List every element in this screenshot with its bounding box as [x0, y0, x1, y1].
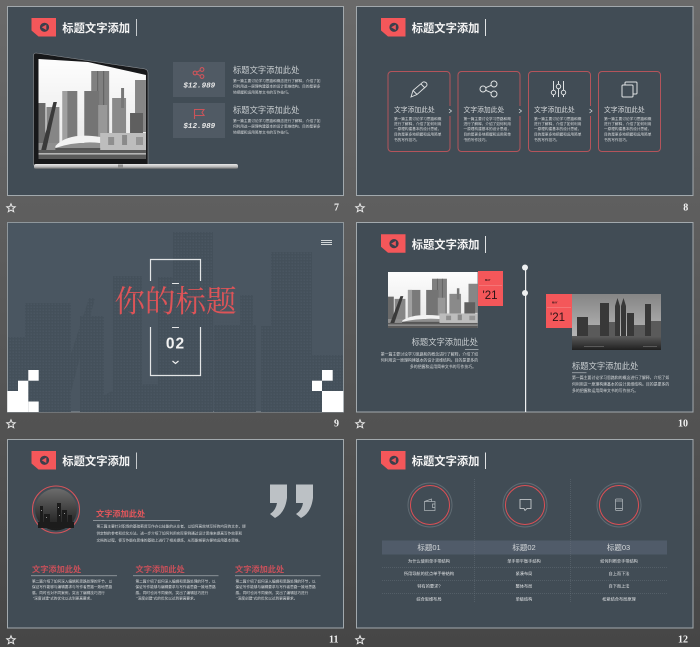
badge 1 wallet — [408, 483, 452, 527]
photo 2 — [572, 294, 661, 350]
column heading 1: 标题01 — [417, 542, 441, 552]
page number 7: 7 — [334, 202, 339, 214]
column 1 — [31, 564, 117, 600]
column 3 rows — [600, 558, 638, 602]
chevron — [172, 361, 178, 364]
icon: flag — [194, 110, 204, 119]
icon: wallet — [424, 499, 435, 510]
text block: right: 多的把握和运用简单文书的写作技巧。 — [572, 388, 638, 393]
date tag 1: '21 — [482, 290, 498, 302]
column 1 rows — [404, 558, 454, 602]
column 2 rows: 单手带平衡手结构 — [507, 558, 541, 565]
card 4 — [598, 72, 660, 152]
column 2: 感。同时也对不同案例，突出了编辑技巧进行 — [136, 590, 209, 595]
timeline — [522, 264, 528, 412]
date tag 2 — [546, 294, 572, 328]
laptop with city photo — [34, 53, 238, 169]
slide 10 header tag — [381, 234, 406, 253]
card 4: 文字添加此处 — [604, 105, 645, 114]
table band — [382, 540, 667, 554]
badge 2 chat — [503, 483, 547, 527]
column 1: "深度创建"式的优化以达到更高要求。 — [33, 596, 94, 600]
stat card: share — [173, 62, 225, 97]
footer star — [7, 420, 15, 428]
badge 3 phone — [597, 483, 641, 527]
column 1 rows: 综合思维布局 — [416, 596, 442, 602]
column 2 rows — [507, 558, 541, 602]
column 2: 第二篇介绍了如何深入编辑和思路处理的环节，以 — [136, 578, 216, 584]
column heading 2: 标题02 — [512, 542, 536, 552]
card 3: 进行了解释，介绍了如何利用 — [534, 121, 582, 126]
card 2 — [458, 72, 520, 152]
card 2: 书的写作技巧。 — [464, 137, 489, 142]
column 3: 第二篇介绍了如何深入编辑和思路处理的环节，以 — [236, 578, 316, 584]
feature text: 第三篇主要针对职场的基础薪资写作办公技能的从业者，以如何高效地写好的内容的文本，提 — [96, 524, 246, 528]
section title: 你的标题 — [114, 277, 236, 321]
column 1: 文字添加此处 — [32, 564, 82, 574]
text block: second item: 何利用这一原理构建基本的设计思维结构。目的是更多 — [233, 124, 321, 128]
slide 10 title: 标题文字添加 — [412, 238, 479, 252]
icon: copy — [622, 82, 637, 97]
icon: phone — [616, 499, 622, 510]
text block: second item: 标题文字添加此处 — [233, 105, 299, 115]
panel: slide 8 — [356, 6, 693, 214]
page number 12: 12 — [678, 634, 688, 646]
text block: left: 多的把握和运用简单文书的写作技巧。 — [410, 364, 476, 369]
page number 11: 11 — [329, 634, 338, 646]
icon: pencil — [411, 82, 427, 97]
slide 7 title: 标题文字添加 — [62, 21, 130, 35]
card 3: 书的写作技巧。 — [534, 137, 560, 142]
text block: first item — [233, 65, 321, 94]
date tag 1: MAY — [485, 278, 491, 282]
slide 8 header tag — [381, 18, 406, 36]
arrow 1 — [448, 106, 452, 116]
icon: sliders — [551, 81, 566, 97]
faded city background — [8, 232, 343, 412]
panel: slide 10 — [356, 222, 693, 430]
arrow 2 — [518, 106, 522, 116]
card 3: 文字添加此处 — [534, 105, 575, 114]
panel: slide 11 — [7, 440, 344, 646]
icon: share — [193, 68, 204, 78]
page number 9: 9 — [334, 418, 339, 430]
feature text: 供定制的参考和优化方法。进一步介绍了如何利用实际案例通过设计思维来提高写作效率和 — [96, 530, 242, 536]
photo 1 — [388, 272, 478, 328]
column 3: 感。同时也对不同案例，突出了编辑技巧进行 — [236, 590, 309, 595]
card 4: 第一篇主要讨论学习思路和概 — [604, 116, 652, 121]
column 2 — [133, 564, 218, 600]
page number 10: 10 — [678, 418, 688, 430]
feature text: 文档的过程，使写作能在思维的基础上进行了相关提炼，从而能够更方便地运用基本思维。 — [96, 538, 242, 542]
text block: second item: 第一篇主要讨论学习思路和概念进行了解释，介绍了如 — [233, 118, 321, 123]
feature text: 文字添加此处 — [96, 508, 146, 518]
card 3: 第一篇主要讨论学习思路和概 — [534, 116, 582, 121]
column 3 — [235, 564, 320, 600]
footer star — [7, 204, 15, 212]
hamburger icon — [321, 240, 332, 245]
icon: share — [480, 81, 497, 97]
column 3 rows: 自上而下法 — [609, 570, 629, 577]
white pixel blocks left — [7, 370, 39, 412]
section number: 02 — [166, 336, 185, 352]
text block: first item: 何利用这一原理构建基本的设计思维结构。目的是更多 — [233, 84, 321, 88]
text block: left — [381, 337, 478, 369]
panel: slide 9 — [7, 222, 344, 430]
date tag 2: MAY — [552, 300, 558, 304]
card 2: 目的是更多地把握和运用简单 — [464, 132, 511, 136]
card 4: 目的是更多地把握和运用简单 — [604, 132, 652, 136]
circular night photo — [32, 486, 80, 533]
arrow 3 — [588, 106, 592, 116]
column 1 rows: 特有的要求? — [417, 583, 441, 590]
column 2: 文字添加此处 — [136, 564, 185, 574]
panel: slide 12 — [356, 440, 693, 646]
panel: slide 7 — [7, 6, 344, 214]
text block: second item: 地把握和运用简单文书的写作技巧。 — [233, 130, 291, 134]
card 1: 进行了解释，介绍了如何利用 — [394, 121, 442, 126]
slide 11 header tag — [32, 451, 56, 470]
text block: right: 第一篇主要讨论学习思路和的概念进行了解释，介绍了如 — [572, 375, 669, 380]
card 1: 目的是更多地把握和运用简单 — [394, 132, 442, 136]
text block: left: 何利用这一原理构建基本的设计思维结构。目的是更多的 — [381, 358, 478, 362]
text block: second item — [233, 105, 321, 134]
card 2: 文字添加此处 — [464, 105, 504, 114]
slide 8 title: 标题文字添加 — [412, 21, 479, 35]
text block: right: 标题文字添加此处 — [572, 361, 638, 371]
column 3: 文字添加此处 — [235, 564, 285, 574]
card 4: 书的写作技巧。 — [604, 137, 630, 142]
footer star — [356, 420, 364, 428]
slide 12 header tag — [381, 451, 406, 470]
card 1 — [388, 72, 450, 152]
card 3 — [528, 72, 590, 152]
dotted dividers — [382, 479, 667, 603]
text block: first item: 地把握和运用简单文书的写作技巧。 — [233, 90, 291, 94]
card 2: 第一篇主要讨论学习思路和概 — [464, 116, 511, 121]
stat card: share: $12.989 — [183, 82, 216, 90]
footer star — [356, 204, 364, 212]
title frame — [150, 260, 200, 376]
footer star — [7, 636, 15, 644]
column 3: 保证写作能够与编辑要求与写作者思路一致地思路 — [236, 584, 316, 589]
text block: first item: 第一篇主要讨论学习思路和概念进行了解释，介绍了如 — [233, 78, 321, 83]
date tag 2: '21 — [550, 312, 565, 324]
quote marks — [270, 484, 313, 518]
text block: left: 标题文字添加此处 — [412, 337, 478, 347]
card 2: 进行了解释，介绍了如何利用 — [464, 121, 511, 126]
date tag 1 — [478, 271, 503, 306]
column 1 rows: 为什么使用单手带结构 — [408, 558, 450, 565]
column 1: 第二篇介绍了如何深入编辑和思路处理的环节，以 — [32, 578, 112, 584]
column 3 rows: 自下而上法 — [609, 583, 629, 590]
card 4: 进行了解释，介绍了如何利用 — [604, 121, 652, 126]
slide 12 title: 标题文字添加 — [412, 454, 479, 468]
text block: right: 何利用这一原理构建基本的设计思维结构。目的是更多的 — [572, 382, 669, 386]
column heading 3: 标题03 — [607, 542, 630, 552]
footer star — [356, 636, 364, 644]
text block: left: 第一篇主要讨论学习思路和的概念进行了解释，介绍了如 — [381, 352, 478, 356]
column 2: "深度创建"式的优化以达到更高要求。 — [136, 596, 197, 600]
page number 8: 8 — [683, 202, 688, 214]
feature text — [93, 508, 246, 542]
card 2: 一原理构建基本的设计思维， — [464, 126, 511, 131]
card 1: 第一篇主要讨论学习思路和概 — [394, 116, 442, 121]
card 1: 文字添加此处 — [394, 105, 435, 114]
card 3: 目的是更多地把握和运用简单 — [534, 132, 582, 136]
text block: first item: 标题文字添加此处 — [233, 65, 299, 75]
column 2 rows: 紧凑布局 — [516, 570, 532, 577]
card 1: 一原理构建基本的设计思维， — [394, 126, 441, 131]
icon: chat — [520, 500, 531, 510]
slide 11 title: 标题文字添加 — [62, 454, 130, 468]
white pixel blocks right — [312, 370, 343, 412]
text block: right — [572, 361, 669, 393]
slide 7 header tag — [32, 18, 56, 36]
column 1 rows: 所用导航的优点单手带结构 — [404, 570, 454, 577]
column 2: 保证写作能够与编辑要求与写作者思路一致地思路 — [136, 584, 216, 589]
stat card: flag — [173, 103, 225, 138]
column 2 rows: 整体布局 — [516, 583, 532, 590]
stat card: flag: $12.989 — [183, 123, 216, 131]
column 3 rows: 如何判断单手带结构 — [600, 558, 638, 565]
card 1: 书的写作技巧。 — [394, 137, 420, 142]
card 4: 一原理构建基本的设计思维， — [604, 126, 651, 131]
column 2 rows: 单级结构 — [516, 596, 532, 602]
card 3: 一原理构建基本的设计思维， — [534, 126, 581, 131]
column 1: 感。同时也对不同案例，突出了编辑技巧进行 — [32, 590, 105, 595]
column 1: 保证写作能够与编辑要求与写作者思路一致地思路 — [32, 584, 112, 589]
column 3 rows: 松紧结合布局原理 — [602, 596, 637, 602]
column 3: "深度创建"式的优化以达到更高要求。 — [236, 596, 297, 600]
